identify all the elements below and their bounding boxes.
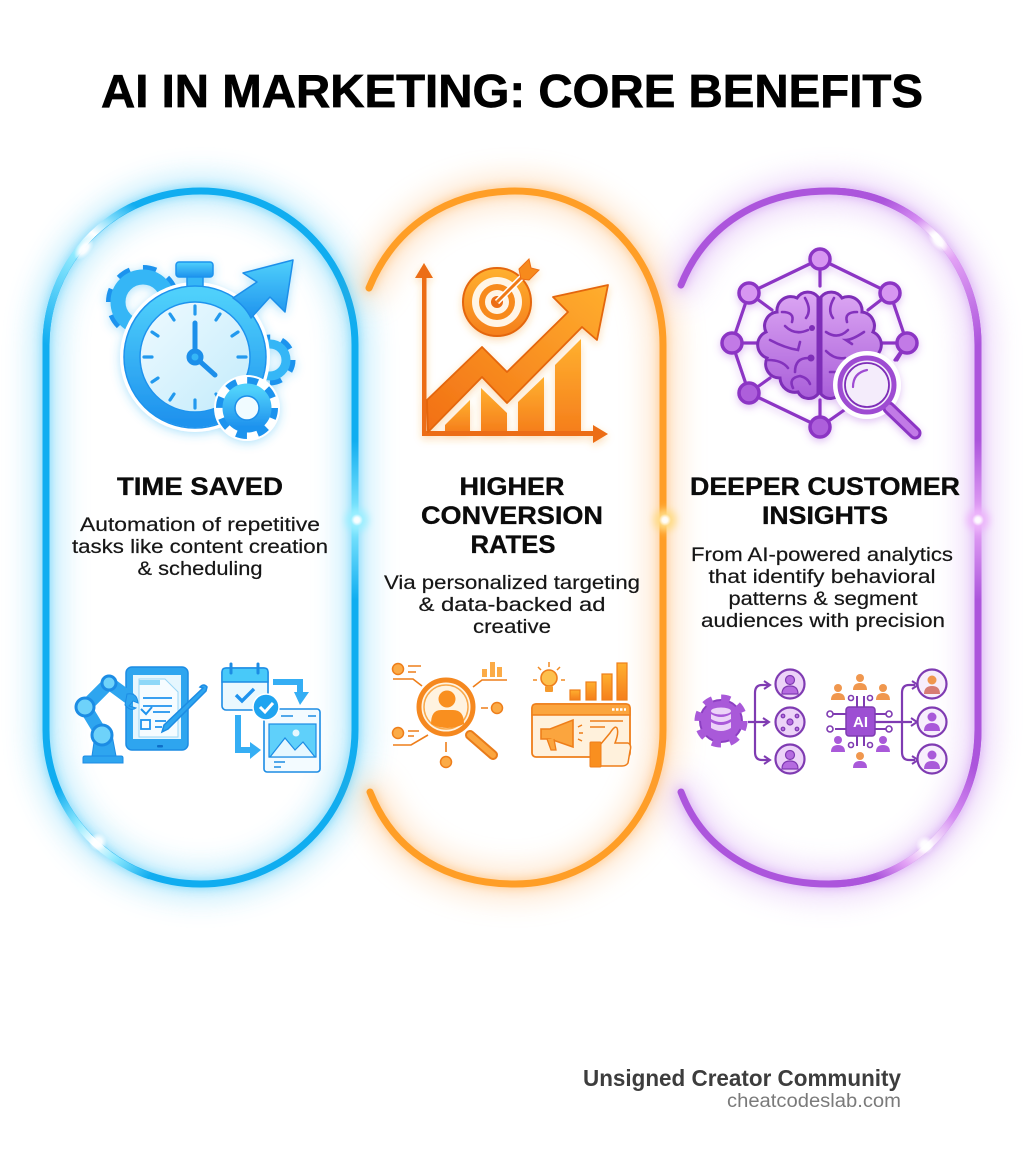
heading: time saved: TIME SAVED — [117, 473, 283, 501]
heading: deeper customer insights: INSIGHTS — [762, 502, 888, 530]
icon: front gear — [214, 375, 280, 441]
icon: crown — [176, 262, 213, 288]
title: AI IN MARKETING: CORE BENEFITS — [101, 65, 923, 117]
panel: deeper customer insights — [681, 191, 989, 884]
icon: brain network with magnifier — [722, 249, 917, 437]
icon: robot arm writing on tablet — [76, 667, 207, 763]
icon: left gear — [112, 271, 174, 333]
text: conversion description: & data-backed ad — [418, 594, 606, 616]
panel: higher conversion rates — [369, 191, 676, 884]
icon: right gear — [249, 339, 291, 381]
glints on blue outline — [70, 235, 368, 851]
clock hands — [189, 323, 215, 375]
heading: higher conversion rates: CONVERSION — [421, 502, 603, 530]
blue capsule outline — [46, 191, 355, 884]
icon: AI chip routed to audiences — [827, 670, 946, 774]
heading: higher conversion rates: HIGHER — [460, 473, 564, 501]
zigzag growth arrow — [427, 285, 608, 432]
text: conversion description — [384, 572, 640, 638]
icon: data gear routed to segments — [698, 670, 804, 774]
text: insights description: From AI-powered analytics — [691, 544, 953, 566]
brain — [758, 292, 881, 398]
text: insights description: that identify behavioral — [708, 566, 936, 588]
text: insights description — [691, 544, 953, 632]
panel: time saved — [46, 191, 368, 884]
icon: target — [463, 259, 539, 336]
icon: clock ring — [132, 294, 258, 420]
text: insights description: audiences with precision — [701, 610, 945, 632]
heading: higher conversion rates — [421, 473, 603, 559]
text: insights description: patterns & segment — [728, 588, 918, 610]
icon: stopwatch with gears and arrow — [112, 260, 293, 441]
icon: AI chip routed to audiences: AI — [853, 714, 868, 731]
purple open capsule outline — [681, 191, 978, 884]
text: conversion description: creative — [473, 616, 551, 638]
network lines — [732, 259, 907, 427]
icon: ad creative window — [532, 662, 631, 767]
footer: brand name: Unsigned Creator Community — [583, 1065, 901, 1091]
clock ticks — [144, 306, 246, 408]
glints on purple outline — [916, 227, 989, 854]
brain folds — [768, 298, 864, 388]
text: time saved description — [72, 514, 328, 580]
icon: audience targeting magnifier — [392, 662, 507, 768]
heading: higher conversion rates: RATES — [470, 531, 556, 559]
text: time saved description: Automation of repetitive — [80, 514, 320, 536]
footer: website: cheatcodeslab.com — [727, 1091, 901, 1112]
icon: target and growth chart — [415, 259, 608, 443]
chart axes — [415, 263, 608, 443]
orange open capsule outline — [369, 191, 663, 884]
text: time saved description: & scheduling — [138, 558, 262, 580]
icon: magnifier — [833, 351, 915, 433]
glint on orange outline — [654, 509, 676, 531]
text: conversion description: Via personalized targeting — [384, 572, 640, 594]
heading: deeper customer insights: DEEPER CUSTOMER — [690, 473, 960, 501]
network nodes — [722, 249, 917, 437]
icon: scheduling calendar and post — [222, 664, 320, 772]
icon: rising arrow — [233, 260, 293, 318]
text: time saved description: tasks like content creation — [72, 536, 328, 558]
heading: deeper customer insights — [690, 473, 960, 530]
chart bars — [445, 339, 581, 431]
